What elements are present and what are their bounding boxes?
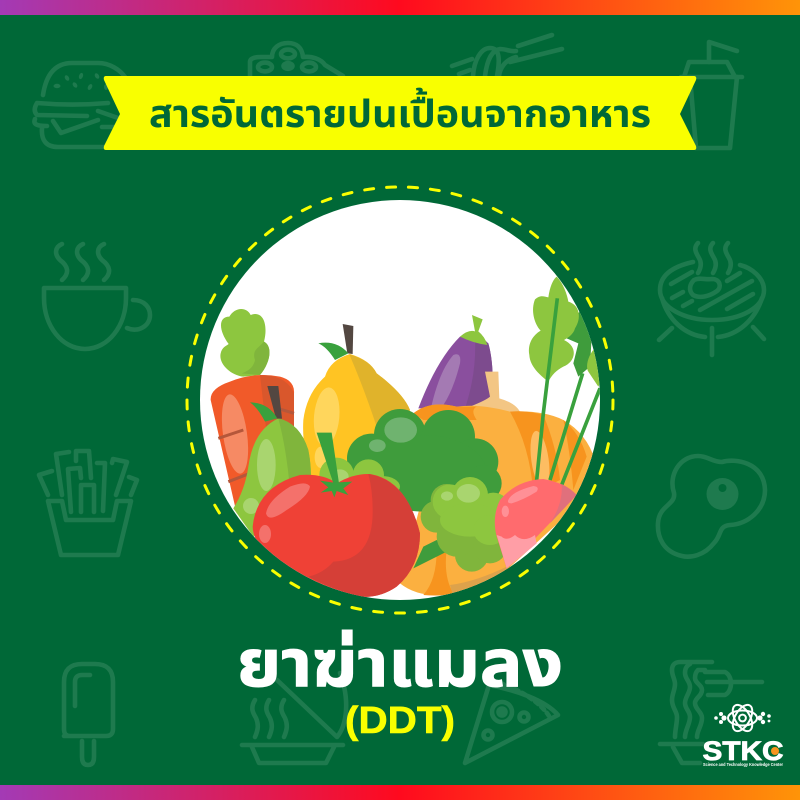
icon: dumpling plate [250, 43, 343, 76]
icon: drink cup [681, 42, 742, 148]
icon: barbecue grill [659, 243, 764, 355]
banner title: สารอันตรายปนเปื้อนจากอาหาร [149, 87, 651, 136]
icon: popsicle [64, 664, 113, 765]
vegetable illustration [211, 277, 603, 597]
logo tagline: Science and Technology Knowledge Center [703, 762, 783, 767]
icon: fried egg [658, 456, 765, 557]
subheading: (DDT) [345, 700, 455, 742]
logo atom [714, 702, 771, 734]
yellow pear [303, 324, 410, 480]
white circle [200, 200, 600, 600]
icon: coffee cup [44, 244, 150, 349]
radish stems and leaves [529, 277, 603, 485]
icon: food bowl [242, 673, 346, 763]
pumpkin [400, 372, 595, 597]
icon: french fries [39, 451, 137, 555]
carrot [211, 309, 294, 513]
banner [104, 76, 696, 150]
STKC logo [702, 702, 784, 767]
logo dot [771, 747, 779, 755]
broccoli [347, 409, 502, 568]
green pear [233, 386, 311, 537]
small broccoli behind tomato [319, 458, 400, 490]
icon: burger [34, 63, 125, 147]
dashed ring [187, 187, 613, 613]
icon: pizza slice [465, 683, 558, 763]
logo wordmark: STKC [702, 736, 784, 766]
tomato [253, 433, 420, 597]
heading: ยาฆ่าแมลง [237, 626, 563, 700]
light green broccoli [421, 477, 511, 572]
icon: noodles with chopsticks [452, 35, 562, 76]
icon: noodle bowl with fork [660, 662, 762, 763]
top gradient bar [0, 0, 800, 15]
bottom gradient bar [0, 785, 800, 800]
eggplant [418, 315, 493, 408]
radish [495, 479, 577, 568]
